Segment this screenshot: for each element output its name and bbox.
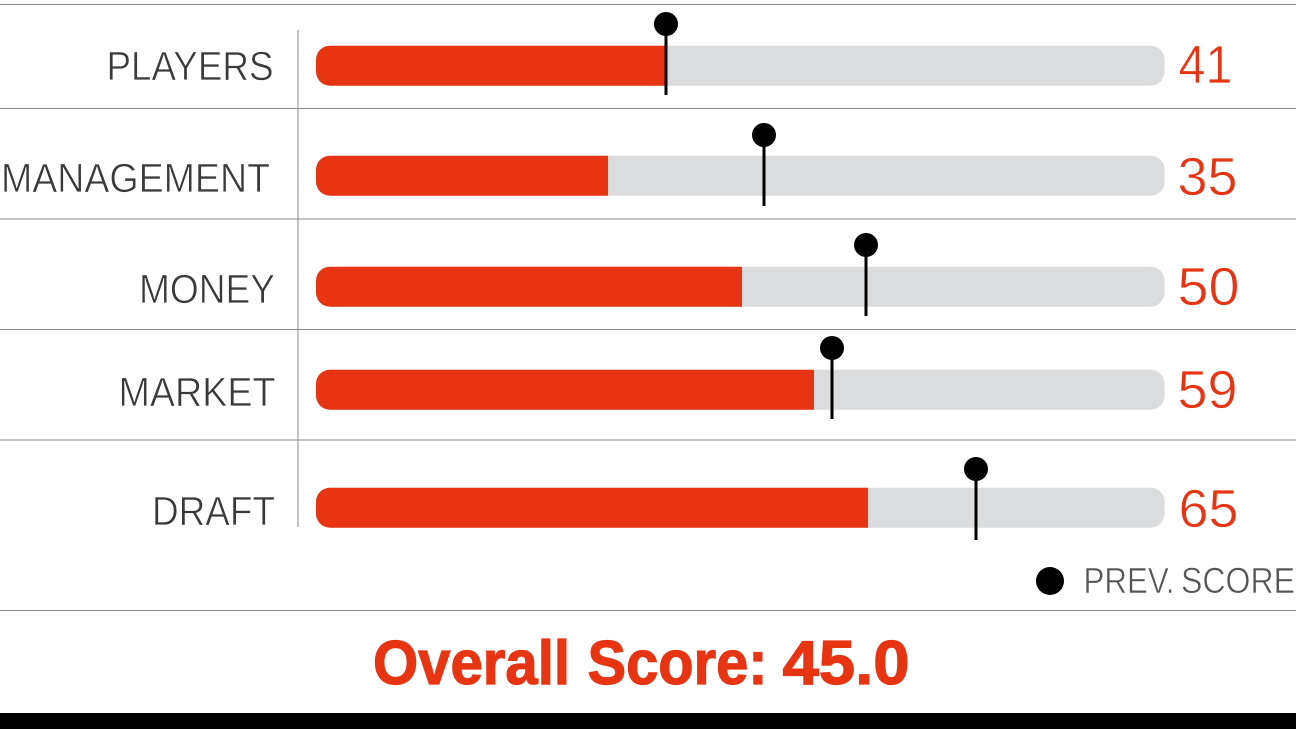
label: draft: DRAFT bbox=[152, 488, 275, 534]
legend: previous score bbox=[1036, 560, 1295, 601]
bar: management track bbox=[316, 156, 1165, 196]
overall score bbox=[373, 629, 910, 698]
marker: market previous score bbox=[820, 336, 844, 419]
row: market bbox=[118, 336, 1238, 420]
bar: draft track bbox=[316, 488, 1165, 528]
bar: money score bbox=[316, 267, 742, 307]
label: money: MONEY bbox=[139, 266, 275, 312]
overall score: Overall bbox=[373, 629, 570, 698]
row: players bbox=[106, 12, 1232, 95]
bar: management score bbox=[316, 156, 608, 196]
overall score: Score: bbox=[588, 629, 768, 698]
bar: draft score bbox=[316, 488, 868, 528]
label: players: PLAYERS bbox=[106, 43, 274, 89]
row: management bbox=[1, 123, 1238, 207]
bar: money track bbox=[316, 267, 1165, 307]
bar: players score bbox=[316, 46, 666, 86]
value: players: 41 bbox=[1178, 35, 1232, 95]
overall score: 45.0 bbox=[782, 629, 910, 698]
bar: market track bbox=[316, 370, 1165, 410]
marker: players previous score bbox=[654, 12, 678, 95]
bar: market score bbox=[316, 370, 814, 410]
marker: management previous score bbox=[752, 123, 776, 206]
marker: draft previous score bbox=[964, 457, 988, 540]
label: management: MANAGEMENT bbox=[1, 155, 270, 201]
row: draft bbox=[152, 457, 1238, 540]
value: market: 59 bbox=[1178, 360, 1238, 420]
value: draft: 65 bbox=[1178, 479, 1238, 539]
value: management: 35 bbox=[1178, 147, 1238, 207]
marker: money previous score bbox=[854, 233, 878, 316]
bar: players track bbox=[316, 46, 1165, 86]
legend label bbox=[1084, 560, 1295, 601]
bottom black band bbox=[0, 713, 1296, 729]
row: money bbox=[139, 233, 1240, 317]
value: money: 50 bbox=[1178, 257, 1240, 317]
icon: legend dot bbox=[1036, 567, 1064, 595]
label: market: MARKET bbox=[118, 369, 276, 415]
legend label: PREV. bbox=[1084, 560, 1174, 601]
